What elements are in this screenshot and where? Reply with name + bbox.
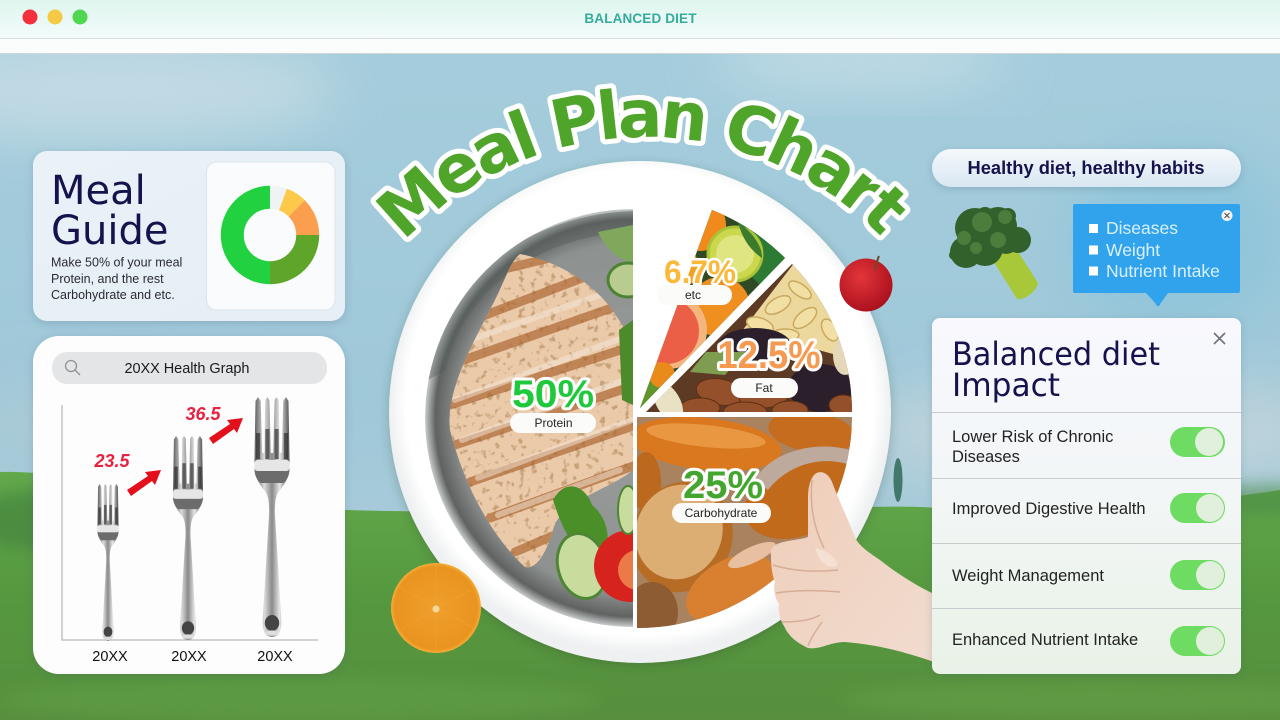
axis labels: 20XX xyxy=(257,649,293,665)
chicken breast xyxy=(445,250,636,570)
window title bar xyxy=(0,0,1280,54)
guide description text: Make 50% of your meal xyxy=(51,256,182,270)
row: Improved Digestive Health xyxy=(952,493,1225,523)
label: 6.7% etc: 6.7% xyxy=(664,254,736,290)
callout: blue tooltip list: Nutrient Intake xyxy=(1106,261,1220,281)
salad: lettuce, cucumber and tomato xyxy=(553,225,633,602)
callout: blue tooltip list: Diseases xyxy=(1106,218,1178,238)
arrow up 2 xyxy=(209,418,243,444)
label: 6.7% etc xyxy=(657,254,736,305)
donut chart xyxy=(232,197,308,273)
panel: Meal Guide xyxy=(33,151,345,321)
value: 23.5: 23.5 xyxy=(93,451,130,471)
row: Enhanced Nutrient Intake: Enhanced Nutrient Intake xyxy=(952,631,1138,649)
label: 25% Carbohydrate xyxy=(672,464,771,523)
label: 50% Protein: Protein xyxy=(534,416,573,430)
guide description text: Carbohydrate and etc. xyxy=(51,288,175,302)
plate section: fat (12.5%) xyxy=(646,264,852,412)
heading: Meal Guide: Meal xyxy=(51,168,146,214)
label: 50% Protein: 50% xyxy=(512,373,594,416)
pill: Healthy diet, healthy habits xyxy=(932,149,1241,187)
fork bar chart xyxy=(62,397,318,665)
row: Lower Risk of Chronic Diseases: Lower Risk of Chronic xyxy=(952,428,1113,446)
heading: Meal Guide xyxy=(51,168,168,254)
label: 12.5% Fat: 12.5% xyxy=(718,334,820,377)
panel: 20XX Health Graph xyxy=(33,336,345,674)
label: 6.7% etc: etc xyxy=(685,288,701,302)
heading: Balanced diet Impact xyxy=(952,335,1160,404)
row: Lower Risk of Chronic Diseases: Diseases xyxy=(952,448,1020,466)
plate section: protein (50%) xyxy=(425,209,633,627)
search bar xyxy=(52,352,327,384)
callout: blue tooltip list xyxy=(1073,204,1240,306)
arrow up 1 xyxy=(127,470,161,496)
plate section: carbohydrate (25%) xyxy=(637,417,852,628)
inner card with donut chart xyxy=(206,162,335,310)
label: 12.5% Fat xyxy=(718,334,820,398)
pill: Healthy diet, healthy habits: Healthy diet, healthy habits xyxy=(968,157,1204,178)
icon: orange slice xyxy=(391,563,481,653)
icon: broccoli xyxy=(949,207,1038,299)
icon: apple xyxy=(840,256,892,312)
axis labels: 20XX xyxy=(92,649,128,665)
row: Improved Digestive Health: Improved Digestive Health xyxy=(952,500,1146,518)
panel: Balanced diet Impact xyxy=(932,318,1241,674)
guide description text: Protein, and the rest xyxy=(51,272,164,286)
heading: Balanced diet Impact: Balanced diet xyxy=(952,335,1160,373)
icon: thumbs-up hand xyxy=(771,472,934,662)
row: Weight Management: Weight Management xyxy=(952,567,1104,585)
row: Lower Risk of Chronic Diseases xyxy=(952,427,1225,466)
plate section: etc (6.7%) xyxy=(640,210,785,408)
icon: close xyxy=(1214,333,1225,344)
callout: blue tooltip list: Weight xyxy=(1106,240,1160,260)
label: 25% Carbohydrate: Carbohydrate xyxy=(685,506,758,520)
search bar: 20XX Health Graph xyxy=(124,361,250,377)
label: 50% Protein xyxy=(510,373,596,433)
heading: Meal Guide: Guide xyxy=(51,208,168,254)
row dividers xyxy=(932,412,1241,608)
axis labels: 20XX xyxy=(171,649,207,665)
label: 12.5% Fat: Fat xyxy=(755,381,773,395)
window title bar: BALANCED DIET xyxy=(584,11,697,26)
guide description text xyxy=(51,256,182,302)
plate xyxy=(389,161,891,663)
heading: Balanced diet Impact: Impact xyxy=(952,366,1060,404)
row: Enhanced Nutrient Intake xyxy=(952,626,1225,656)
axis labels xyxy=(92,649,293,665)
title: Meal Plan Chart: Meal Plan Chart xyxy=(370,83,910,242)
row: Weight Management xyxy=(952,560,1225,590)
value: 36.5: 36.5 xyxy=(185,404,221,424)
label: 25% Carbohydrate: 25% xyxy=(683,464,763,507)
